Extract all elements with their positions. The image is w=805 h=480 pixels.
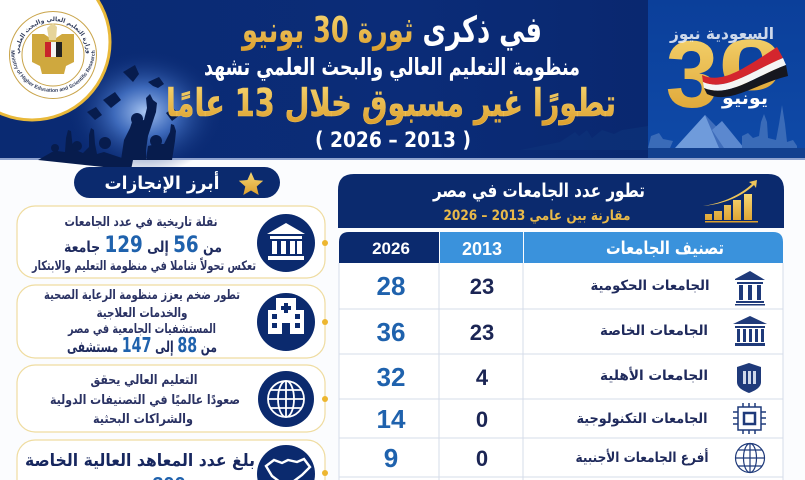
icon: university building [257,214,315,272]
card: rankings: التعليم العالي يحقق [90,373,198,388]
row: technological universities: 0 [476,407,488,432]
table header: 2013 [440,232,523,263]
row: national universities: 4 [476,365,489,390]
icon: globe [258,371,314,427]
card: hospitals: من 88 إلى 147 مستشفى [67,333,217,357]
logo emblem [32,23,74,74]
icon: globe line [736,443,764,473]
achievements heading text: أبرز الإنجازات [104,171,220,194]
table title panel [338,174,784,228]
pyramids and skyline [520,105,805,158]
card: universities [17,206,328,278]
row: government universities: الجامعات الحكومية [590,278,710,294]
row: private universities: الجامعات الخاصة [600,323,708,339]
card: hospitals [17,285,328,358]
row: foreign branches [384,443,764,473]
card: universities: تعكس تحولاً شاملا في منظومة التعليم والابتكار [31,257,256,274]
row: technological universities: الجامعات التكنولوجية [576,411,708,427]
title line 2: منظومة التعليم العالي والبحث العلمي تشهد [204,53,580,81]
row: private universities [377,316,767,347]
row: foreign branches: 9 [384,443,398,473]
card: universities: من 56 إلى 129 جامعة [64,233,222,258]
icon: hospital [257,293,315,351]
row: private universities: 23 [470,320,494,345]
card: rankings [17,365,328,432]
achievements heading pill [74,167,280,198]
card: private institutes [17,440,328,480]
30 june emblem: 0 [718,26,784,106]
30 june emblem: 3 [666,22,718,128]
table header: 2013: 2013 [462,239,502,259]
icon: growth chart [703,180,758,222]
row: foreign branches: 0 [476,446,488,471]
card: private institutes: بلغ عدد المعاهد العالية الخاصة [25,451,255,471]
june label: يونيو [721,88,768,109]
card: universities: نقلة تاريخية في عدد الجامعات [64,215,218,230]
row: government universities: 23 [470,274,494,299]
row: foreign branches: أفرع الجامعات الأجنبية [576,448,708,466]
ministry logo [0,0,112,122]
icon: shield [737,363,761,393]
title line 1: في ذكرى ثورة 30 يونيو [241,10,542,51]
table header: category [524,232,783,263]
row: national universities [377,362,761,393]
row: national universities: 32 [377,362,405,392]
row: government universities [377,271,765,306]
icon: star [239,172,263,195]
row: technological universities: 14 [377,404,406,434]
table title: تطور عدد الجامعات في مصر [432,180,645,202]
card: rankings: صعودًا عالميًا في التصنيفات الدولية [50,393,240,408]
row: technological universities [377,403,766,434]
card: hospitals: المستشفيات الجامعية في مصر [67,322,216,337]
watermark: السعودية نيوز [669,24,774,43]
table header: 2026: 2026 [372,239,410,258]
card: hospitals: تطور ضخم يعزز منظومة الرعاية الصحية [44,288,240,303]
icon: private building [733,316,767,346]
row: national universities: الجامعات الأهلية [600,367,708,384]
graduates silhouette [38,65,180,170]
30 june emblem [666,22,788,128]
table subtitle: مقارنة بين عامي 2013 – 2026 [444,208,630,224]
card: rankings: والشراكات البحثية [93,412,193,427]
logo ring text: وزارة التعليم العالي والبحث العلمي [16,16,90,54]
logo ring text [11,16,95,92]
header banner [0,0,805,174]
title line 3: تطورًا غير مسبوق خلال 13 عامًا [166,81,616,125]
table [339,232,783,480]
logo ring text: Ministry of Higher Education and Scientific Research [11,50,95,92]
card: hospitals: والخدمات العلاجية [96,306,188,321]
row: private universities: 36 [377,317,405,347]
table header: 2026 [339,232,439,263]
icon: chip [733,403,766,434]
title years: ( 2013 – 2026 ) [315,128,471,152]
icon: government building [735,271,765,306]
table header: category: تصنيف الجامعات [606,238,724,259]
icon: handshake [257,445,315,480]
row: government universities: 28 [377,271,405,301]
